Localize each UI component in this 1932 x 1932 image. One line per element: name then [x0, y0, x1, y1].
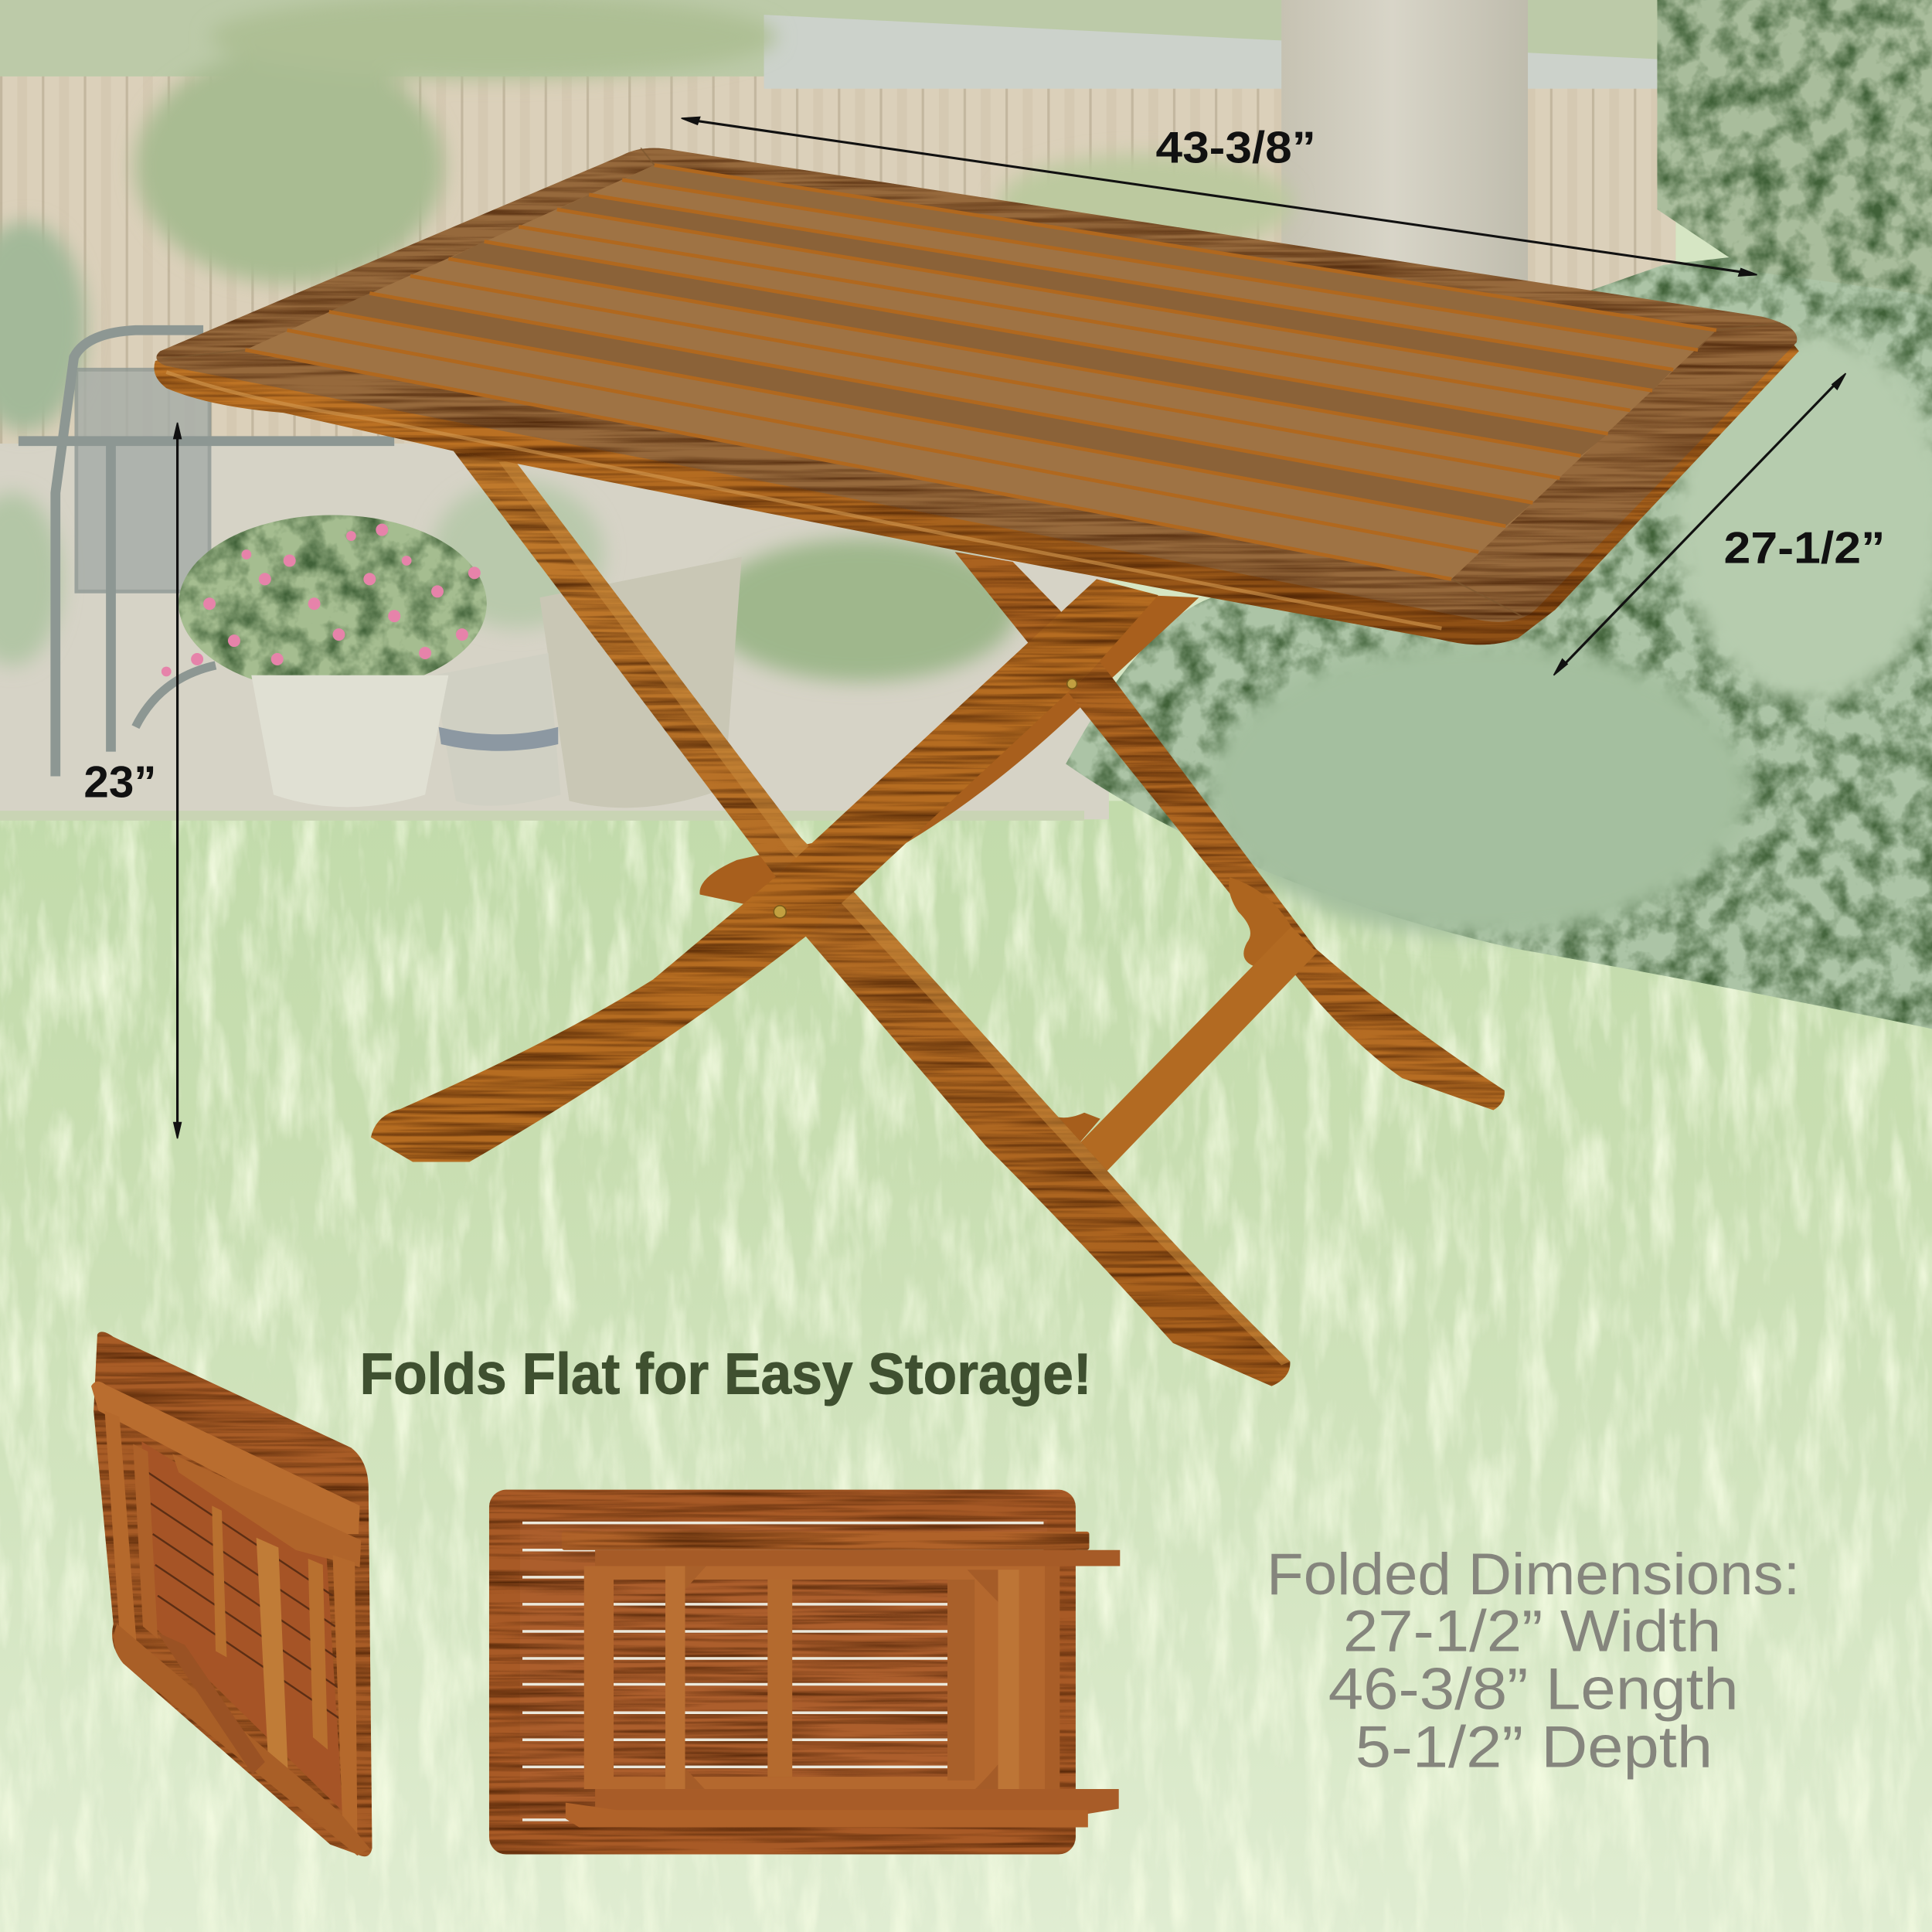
garden table	[19, 441, 394, 752]
plants behind pots	[431, 481, 604, 628]
slat gaps	[245, 165, 1716, 579]
cross bar	[1077, 927, 1317, 1178]
left foliage	[0, 222, 87, 431]
dimension label: width: 27-1/2”	[1724, 524, 1885, 573]
cross bar right	[998, 1570, 1019, 1799]
dimension arrow: width	[1554, 373, 1845, 675]
edge highlight	[166, 372, 1441, 628]
large planter	[539, 557, 742, 808]
vertical bar right two	[308, 1559, 328, 1750]
front straight leg	[454, 451, 1290, 1386]
hedge	[709, 539, 1016, 682]
bracket bottom right	[961, 1764, 998, 1801]
back curved leg	[699, 595, 1199, 906]
yellow flower foliage	[998, 154, 1294, 253]
shrub shadow	[1675, 332, 1932, 702]
plank gaps	[148, 1472, 340, 1719]
second leg bar	[172, 1454, 361, 1567]
pink flowers	[162, 524, 481, 676]
chair frame	[56, 330, 203, 776]
bush leaves	[179, 515, 487, 692]
bracket bottom left	[685, 1768, 723, 1810]
arrowhead top	[174, 423, 181, 439]
dimension label: height: 23”	[83, 758, 156, 808]
blue banded pot	[434, 653, 560, 806]
white pot	[251, 675, 448, 807]
folded width: 27-1/2” Width	[1343, 1598, 1721, 1664]
flower bush	[162, 515, 487, 692]
folded heading: Folded Dimensions:	[1267, 1542, 1800, 1607]
chair mesh	[77, 369, 209, 591]
wall and upper garden	[0, 0, 1932, 87]
foliage behind lower left	[0, 493, 62, 665]
patio	[0, 444, 1109, 819]
top hedge	[209, 0, 776, 79]
foliage on fence	[0, 0, 1932, 937]
cross bar left	[665, 1550, 685, 1810]
folded table: flat view	[489, 1490, 1120, 1855]
back straight leg	[955, 552, 1505, 1111]
upper leg bar	[91, 1382, 360, 1534]
arrowhead top	[1832, 373, 1845, 389]
silver gaps	[522, 1523, 1043, 1820]
bracket top left	[685, 1550, 721, 1590]
lower brace	[158, 1633, 265, 1774]
table top front edge	[154, 247, 1799, 645]
fence cap cover	[764, 15, 1657, 89]
top bar	[562, 1532, 1089, 1550]
rear bolt	[1067, 679, 1077, 689]
lower second bar	[595, 1789, 1119, 1814]
bracket top right	[968, 1570, 998, 1602]
folded length: 46-3/8” Length	[1328, 1656, 1739, 1722]
slatted inner field	[245, 165, 1716, 579]
arrowhead bottom	[174, 1122, 181, 1138]
lawn	[0, 801, 1932, 1932]
climbing plant	[135, 49, 444, 284]
front curved leg	[371, 579, 1158, 1162]
frame mitre joints	[162, 148, 1781, 616]
plank field	[141, 1441, 342, 1811]
dimension label: length: 43-3/8”	[1156, 123, 1316, 172]
vertical frame bar left	[105, 1411, 138, 1663]
arrowhead right	[1739, 269, 1757, 276]
vertical frame bar second	[133, 1444, 158, 1639]
folded table: angled view	[91, 1332, 372, 1856]
vertical bar right one	[257, 1538, 288, 1781]
lower curved bar	[114, 1624, 369, 1855]
lawn edge shade	[0, 811, 1084, 821]
vertical frame bar middle	[212, 1505, 226, 1657]
folded tabletop base	[94, 1332, 372, 1856]
tabletop frame	[489, 1490, 1076, 1855]
vertical bar right three	[332, 1555, 357, 1836]
dimension arrow: length	[682, 117, 1757, 276]
main table	[154, 148, 1799, 1386]
leg side shading	[499, 461, 1290, 1366]
chair	[19, 330, 394, 776]
fence	[0, 77, 1675, 446]
frame rectangle	[584, 1566, 1060, 1789]
upper right foliage	[1657, 0, 1932, 296]
darker slats	[329, 165, 1716, 526]
cross bar inner right	[947, 1580, 975, 1781]
table top surface	[156, 148, 1797, 622]
second bar	[595, 1550, 1120, 1566]
bottom bar	[566, 1803, 1088, 1827]
plank field	[520, 1519, 1047, 1824]
cross bar center	[767, 1580, 792, 1777]
right shrubs	[1066, 234, 1932, 1029]
back bracket	[1229, 877, 1291, 968]
tree trunk	[1281, 0, 1528, 290]
soft shrub highlight	[1207, 641, 1750, 937]
arrowhead bottom	[1554, 659, 1567, 675]
front bracket	[1043, 1111, 1100, 1146]
dimension arrow: height	[174, 423, 181, 1138]
arrowhead left	[682, 117, 700, 124]
heading: folds flat: Folds Flat for Easy Storage!	[360, 1341, 1092, 1406]
folded depth: 5-1/2” Depth	[1355, 1714, 1713, 1780]
frame right rail	[1045, 1566, 1060, 1789]
folded dimensions text	[1267, 1542, 1800, 1780]
front bolt	[774, 906, 786, 918]
chair leg	[135, 665, 216, 727]
pot band	[439, 727, 558, 751]
